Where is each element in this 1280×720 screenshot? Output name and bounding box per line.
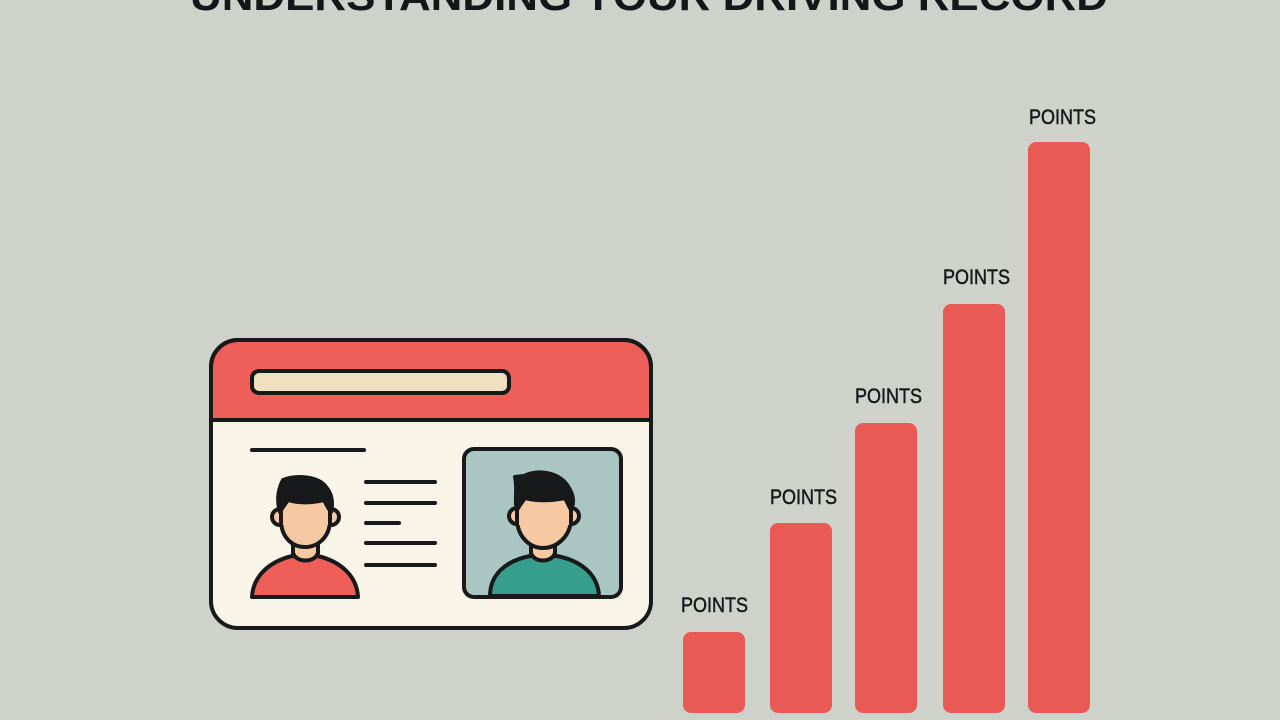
card body (211, 340, 651, 628)
bar 3: POINTS (855, 385, 922, 408)
small person icon (252, 477, 358, 597)
photo frame with person (464, 449, 621, 597)
bar 4 (943, 266, 1010, 713)
bar 5 (1028, 106, 1096, 713)
bar 1 (681, 594, 748, 713)
header name pill (252, 371, 509, 393)
icon: driver's license card (211, 340, 651, 628)
card outline (211, 340, 651, 628)
bar 2: POINTS (770, 486, 837, 509)
bar 4: POINTS (943, 266, 1010, 289)
bar 5: POINTS (1029, 106, 1096, 129)
bar chart: points (681, 106, 1096, 713)
card header band (211, 340, 651, 420)
bar 3 (855, 385, 922, 713)
title line (252, 448, 364, 452)
bar 1: POINTS (681, 594, 748, 617)
bar 2 (770, 486, 837, 713)
text lines (366, 482, 435, 565)
